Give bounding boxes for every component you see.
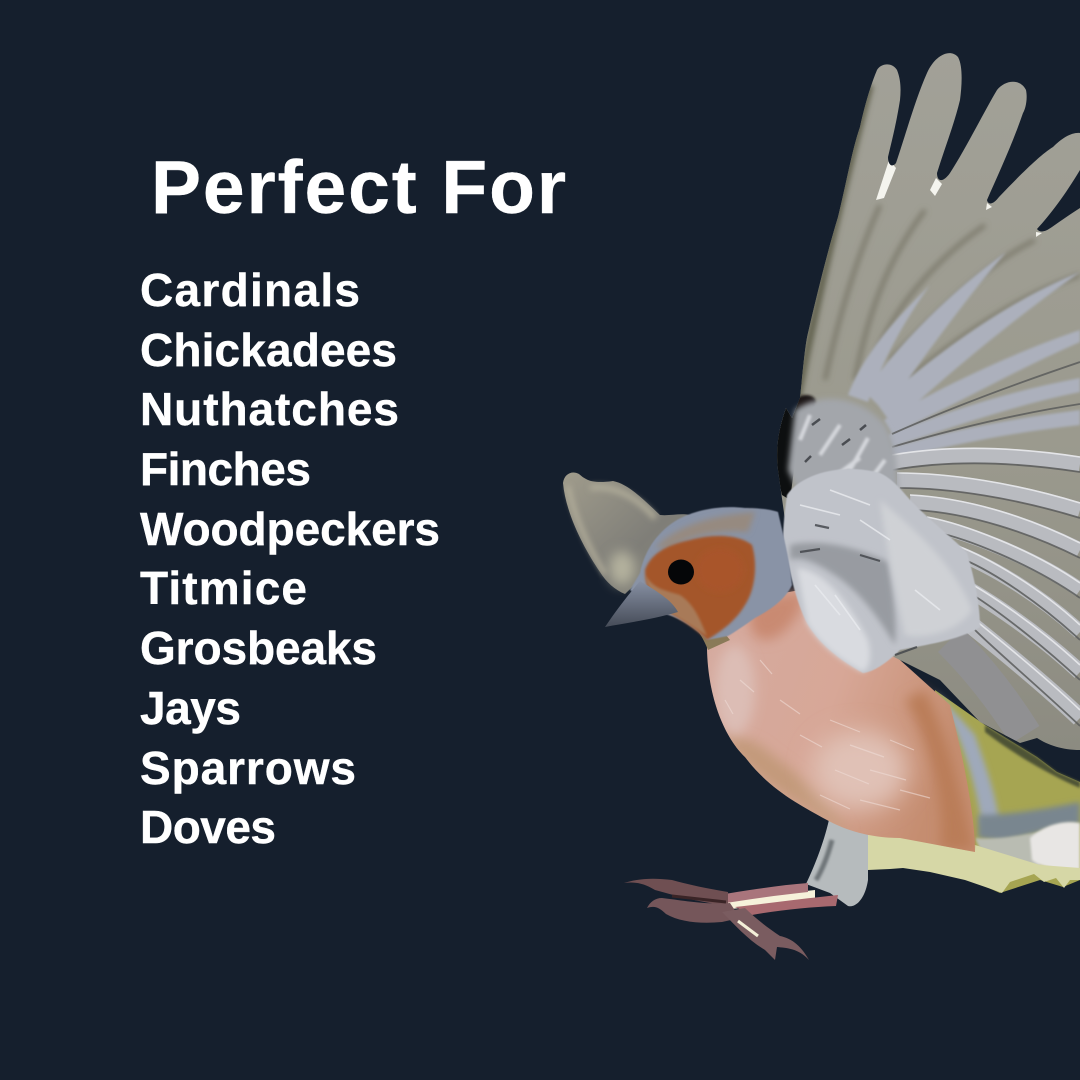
lower leg [735, 895, 838, 915]
dark feather bar [790, 543, 896, 645]
shadow lines between shafts [892, 362, 1080, 726]
brown crown streak [655, 512, 755, 548]
far wing [563, 472, 690, 594]
orange cheek [645, 536, 755, 640]
secondary coverts [788, 399, 900, 510]
flank orange [905, 690, 975, 850]
breast fur strokes [725, 660, 930, 810]
legs and feet [624, 815, 1080, 960]
primaries: upper shaft bands [848, 252, 1080, 460]
body and breast [707, 590, 975, 852]
list item: Chickadees: Chickadees [140, 324, 397, 376]
list item: Doves: Doves [140, 801, 276, 853]
upper leg [718, 883, 808, 904]
list item: Grosbeaks: Grosbeaks [140, 622, 377, 674]
undertail fringe [865, 830, 1080, 893]
throat shading [685, 615, 730, 650]
black wrist [777, 398, 804, 498]
gap highlights [876, 160, 1042, 237]
list item: Woodpeckers: Woodpeckers [140, 503, 440, 555]
rump and tail [935, 690, 1080, 893]
primaries: lower shaft bands [890, 455, 1080, 735]
upper thigh [806, 815, 868, 906]
head [605, 507, 792, 650]
belly shading [726, 732, 837, 825]
bright lower lobe [797, 568, 870, 672]
wing feathers [770, 40, 1080, 770]
leading edge shadow [795, 85, 870, 410]
bright right lobe [880, 500, 972, 636]
list item: Cardinals: Cardinals [140, 264, 360, 316]
list item: Sparrows: Sparrows [140, 742, 356, 794]
list item: Nuthatches: Nuthatches [140, 383, 399, 435]
list item: Jays: Jays [140, 682, 241, 734]
shoulder coverts [783, 469, 980, 673]
eye [668, 560, 694, 584]
bird species list [140, 264, 440, 853]
title: Perfect For [151, 145, 566, 229]
feather fold lines [825, 205, 1080, 385]
grey hood [630, 507, 792, 640]
toes [624, 879, 728, 906]
list item: Titmice: Titmice [140, 562, 307, 614]
pale strip between legs [722, 890, 815, 910]
beak [605, 581, 678, 627]
near wing [770, 40, 1080, 770]
list item: Finches: Finches [140, 443, 311, 495]
highlight lines on shafts [892, 448, 1080, 710]
illustration: chaffinch in flight [563, 40, 1080, 960]
